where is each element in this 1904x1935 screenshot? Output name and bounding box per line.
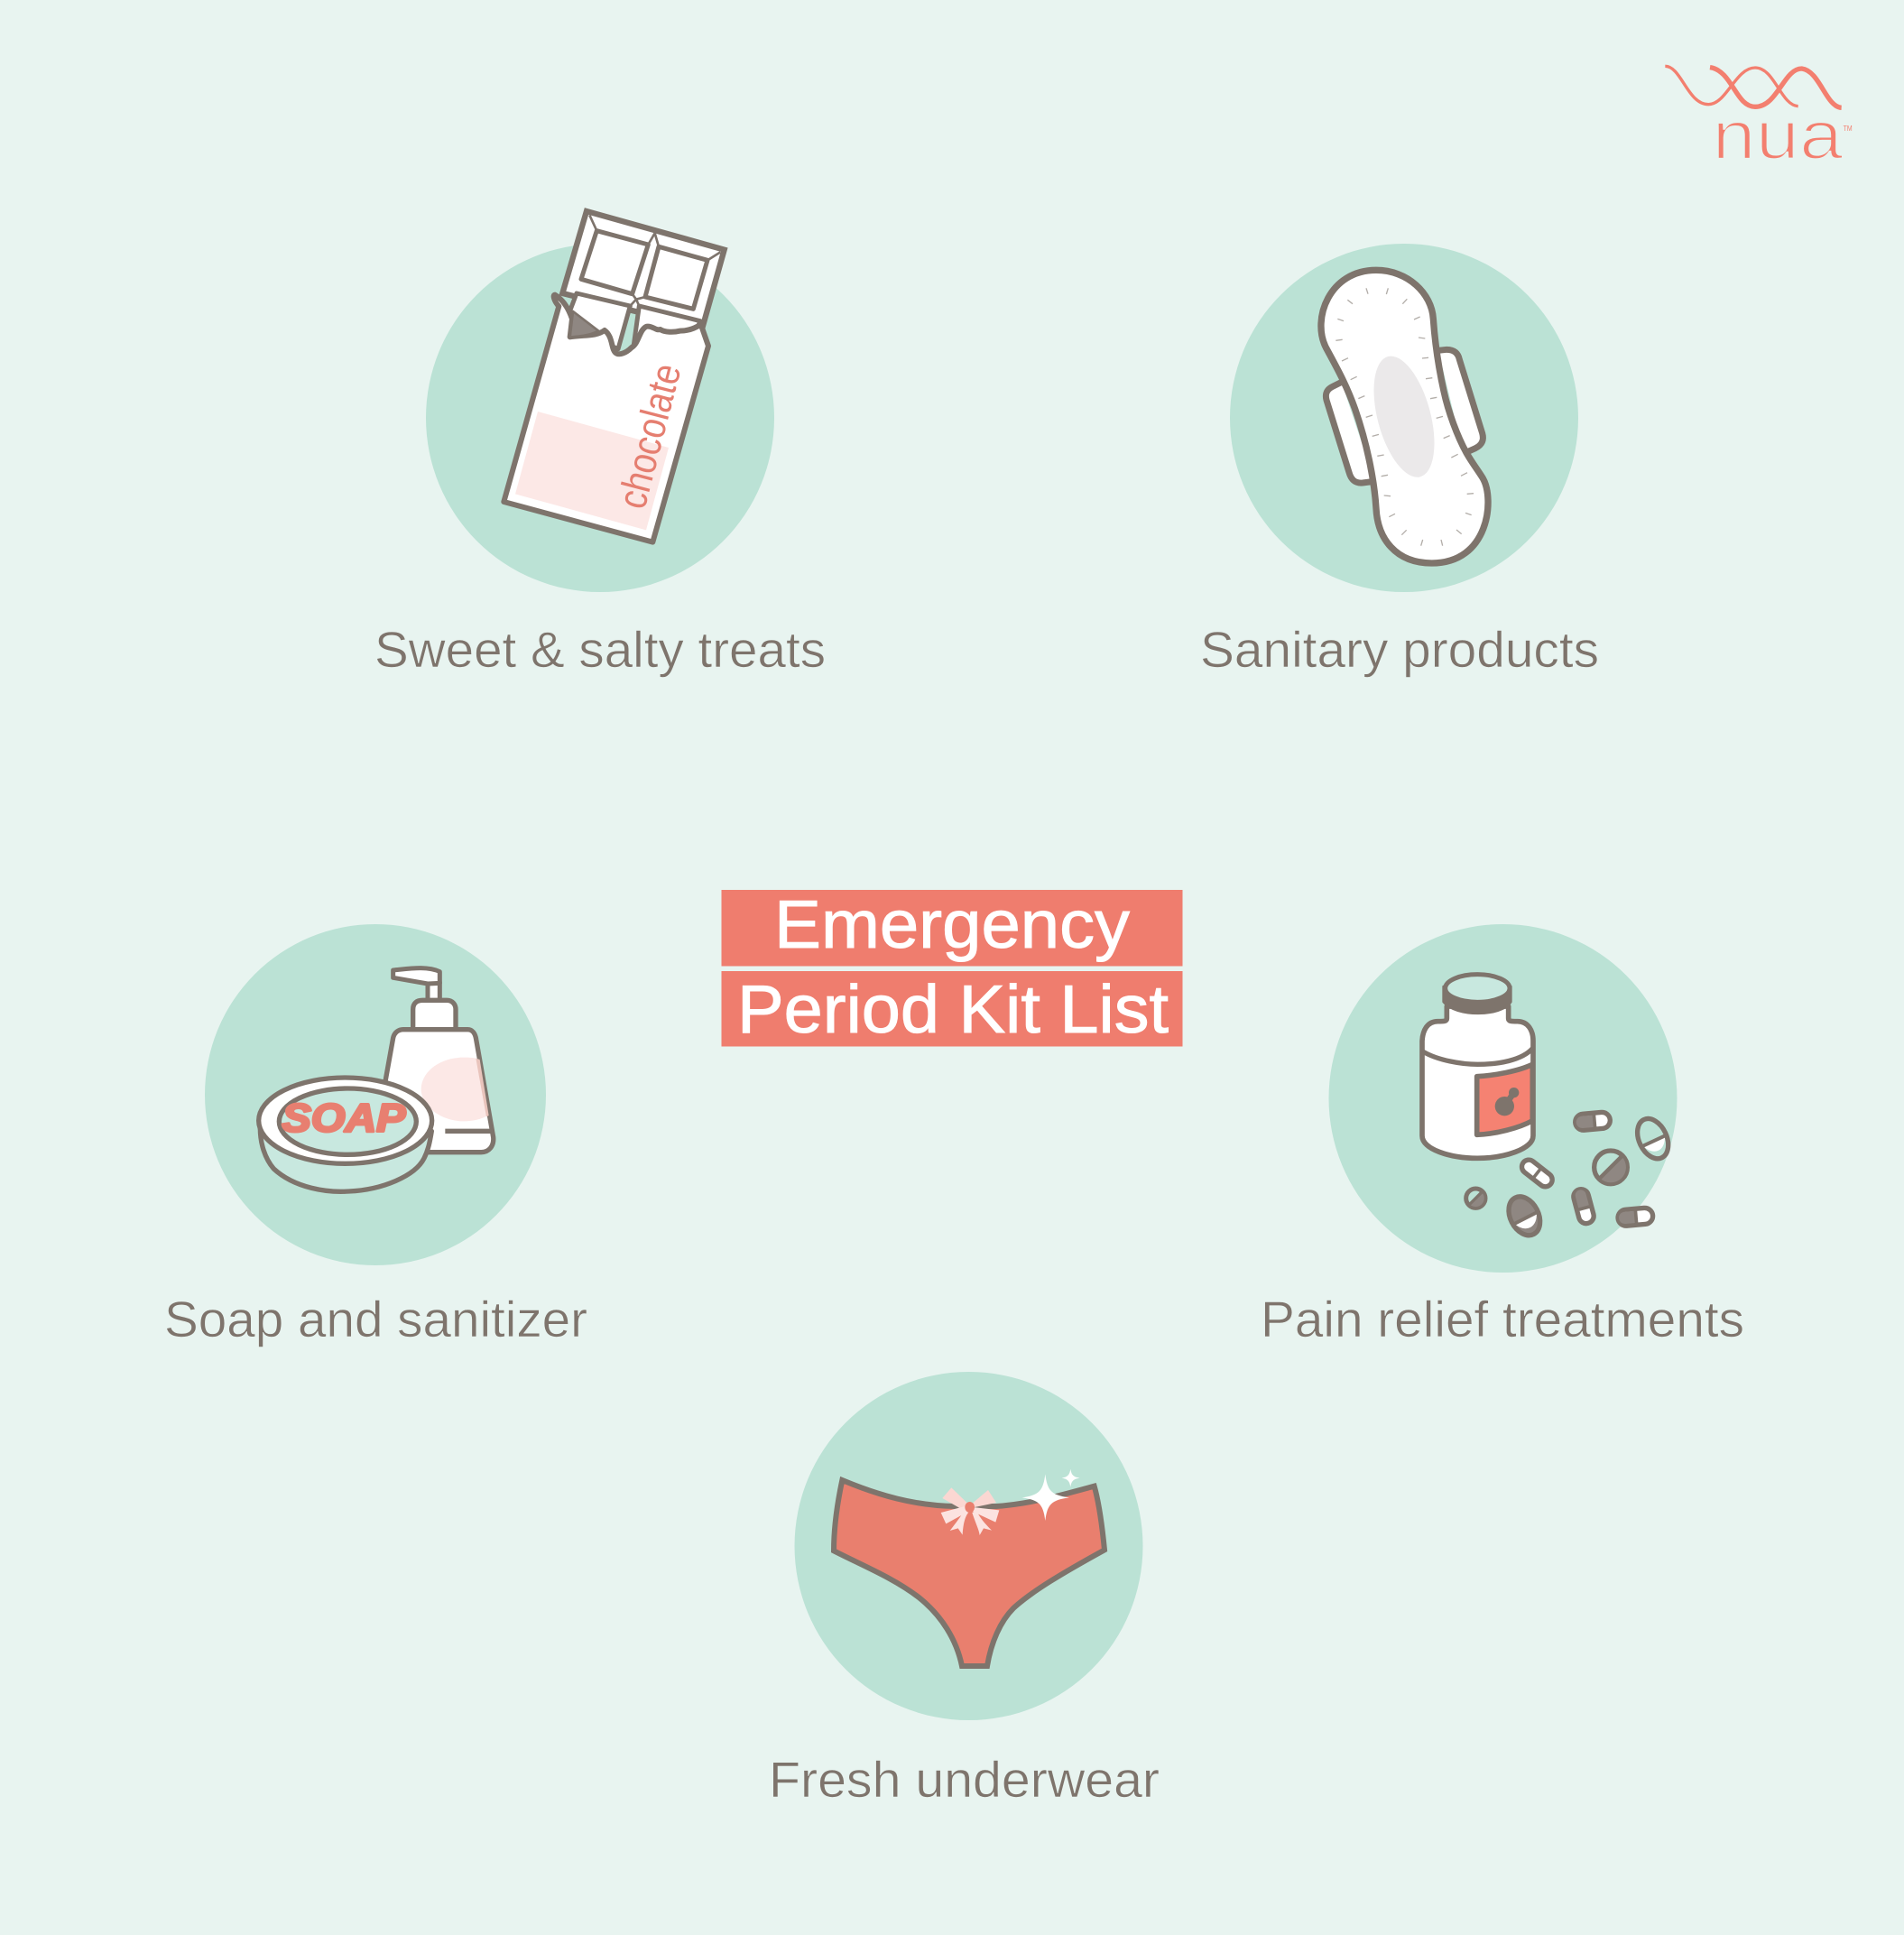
label glyph — [1495, 1088, 1519, 1116]
capsule 1 — [1575, 1112, 1611, 1131]
wrapper pink panel — [515, 412, 669, 530]
label: Soap and sanitizer — [164, 1291, 587, 1347]
small sparkle — [1062, 1469, 1080, 1487]
bottle label edge — [476, 1059, 489, 1116]
circle backdrop — [426, 244, 774, 592]
capsule 2 — [1519, 1157, 1555, 1190]
panel: pain relief treatments — [1261, 924, 1744, 1347]
panel: sweet and salty treats — [374, 211, 826, 678]
title line two: Period Kit List — [737, 971, 1169, 1047]
icon: chocolate bar — [504, 211, 725, 542]
round tablet large — [1594, 1151, 1627, 1184]
bottle body — [1422, 1006, 1533, 1158]
absorbent core — [1363, 349, 1446, 484]
pump stem — [428, 982, 439, 1002]
bottle cap — [1444, 986, 1511, 1013]
pad wings — [1326, 349, 1483, 483]
label: Pain relief treatments — [1261, 1291, 1744, 1347]
circle backdrop — [794, 1372, 1142, 1720]
panel: sanitary products — [1200, 244, 1599, 678]
icon: pill bottle and pills — [1422, 975, 1674, 1241]
bottle pink label — [421, 1058, 488, 1121]
logo wave strand thick — [1710, 68, 1842, 107]
soap tin base — [260, 1128, 431, 1191]
logo: nua — [1665, 66, 1853, 174]
wrapper fold shadow — [570, 311, 598, 337]
label: Sanitary products — [1200, 621, 1599, 678]
bottle label — [1477, 1064, 1532, 1134]
icon: soap and pump bottle — [259, 968, 494, 1191]
chocolate squares — [562, 211, 725, 349]
pad body — [1321, 270, 1488, 563]
oval tablet 2 — [1502, 1191, 1547, 1241]
wrapper text: chocolate — [608, 359, 690, 514]
logo wave strand thin — [1665, 66, 1798, 106]
panel: soap and sanitizer — [164, 924, 587, 1347]
circle backdrop — [1230, 244, 1578, 592]
logo trademark: TM — [1844, 125, 1853, 133]
bottle shoulder curve — [1423, 1049, 1532, 1064]
title bar bottom — [722, 971, 1182, 1047]
title line one: Emergency — [774, 886, 1131, 962]
large sparkle — [1022, 1474, 1069, 1521]
panel: fresh underwear — [769, 1372, 1160, 1808]
bottle body — [385, 1030, 494, 1153]
panel: title — [722, 886, 1182, 1047]
bottle neck — [413, 1000, 456, 1030]
briefs — [834, 1480, 1105, 1666]
oval tablet 1 — [1631, 1114, 1674, 1163]
icon: underwear — [834, 1469, 1105, 1666]
title bar top — [722, 890, 1182, 966]
logo wordmark: nua — [1712, 97, 1844, 174]
capsule 3 — [1572, 1188, 1595, 1225]
circle backdrop — [1328, 924, 1677, 1273]
wrapper — [504, 295, 708, 542]
soap tin inner — [279, 1088, 416, 1154]
label: Sweet & salty treats — [374, 621, 826, 678]
capsule 4 — [1617, 1208, 1653, 1227]
bottle base line — [445, 1124, 492, 1138]
cap top — [1446, 975, 1510, 1002]
bow — [941, 1487, 999, 1535]
pad stitch marks — [1336, 288, 1474, 546]
label: Fresh underwear — [769, 1751, 1160, 1808]
circle backdrop — [205, 924, 546, 1265]
icon: sanitary pad — [1321, 270, 1488, 563]
soap text: SOAP — [282, 1096, 406, 1140]
soap tin lid — [259, 1078, 432, 1163]
small round tablet — [1466, 1189, 1485, 1208]
pump head — [393, 968, 439, 984]
